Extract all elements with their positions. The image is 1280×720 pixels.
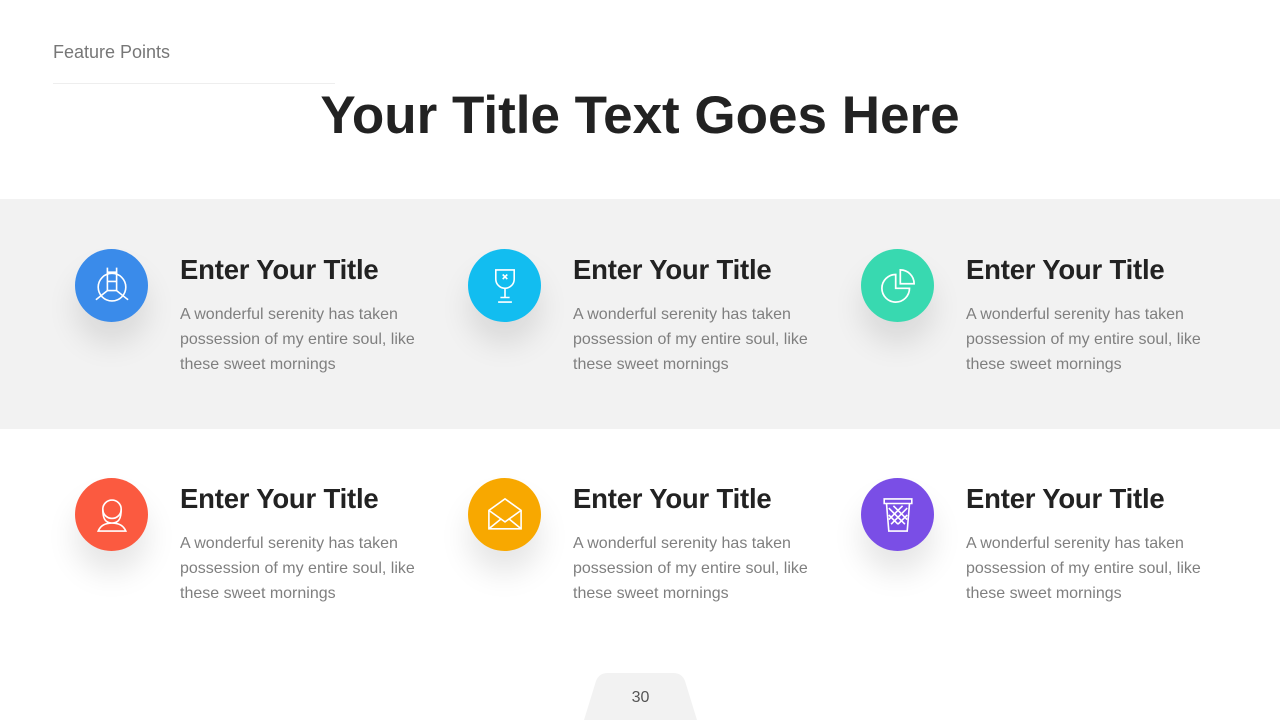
card 4 — [72, 478, 415, 602]
card 2 — [465, 249, 808, 373]
icon: basket — [861, 478, 934, 551]
icon: pie chart — [861, 249, 934, 322]
card 5: Enter Your Title — [573, 483, 772, 514]
card 5: A wonderful serenity has taken possession of my entire soul, like these sweet mornings — [573, 535, 808, 602]
card 2: Enter Your Title — [573, 254, 772, 285]
title: Your Title Text Goes Here — [320, 86, 960, 145]
card 4: Enter Your Title — [180, 483, 379, 514]
card 1: Enter Your Title — [180, 254, 379, 285]
page number tab: 30 — [632, 689, 649, 706]
subtitle: Feature Points: Feature Points — [53, 42, 170, 62]
panel: grey band — [0, 199, 1280, 429]
icon: person — [75, 478, 148, 551]
card 6: Enter Your Title — [966, 483, 1165, 514]
card 4: A wonderful serenity has taken possession of my entire soul, like these sweet mornings — [180, 535, 415, 602]
card 2: A wonderful serenity has taken possession of my entire soul, like these sweet mornings — [573, 306, 808, 373]
icon: trophy — [468, 249, 541, 322]
icon: hands — [75, 249, 148, 322]
card 6 — [858, 478, 1201, 602]
icon: envelope — [468, 478, 541, 551]
card 3: A wonderful serenity has taken possession of my entire soul, like these sweet mornings — [966, 306, 1201, 373]
card 5 — [465, 478, 808, 602]
card 3: Enter Your Title — [966, 254, 1165, 285]
card 6: A wonderful serenity has taken possession of my entire soul, like these sweet mornings — [966, 535, 1201, 602]
card 1 — [72, 249, 415, 373]
card 1: A wonderful serenity has taken possession of my entire soul, like these sweet mornings — [180, 306, 415, 373]
page number tab — [584, 673, 697, 720]
card 3 — [858, 249, 1201, 373]
